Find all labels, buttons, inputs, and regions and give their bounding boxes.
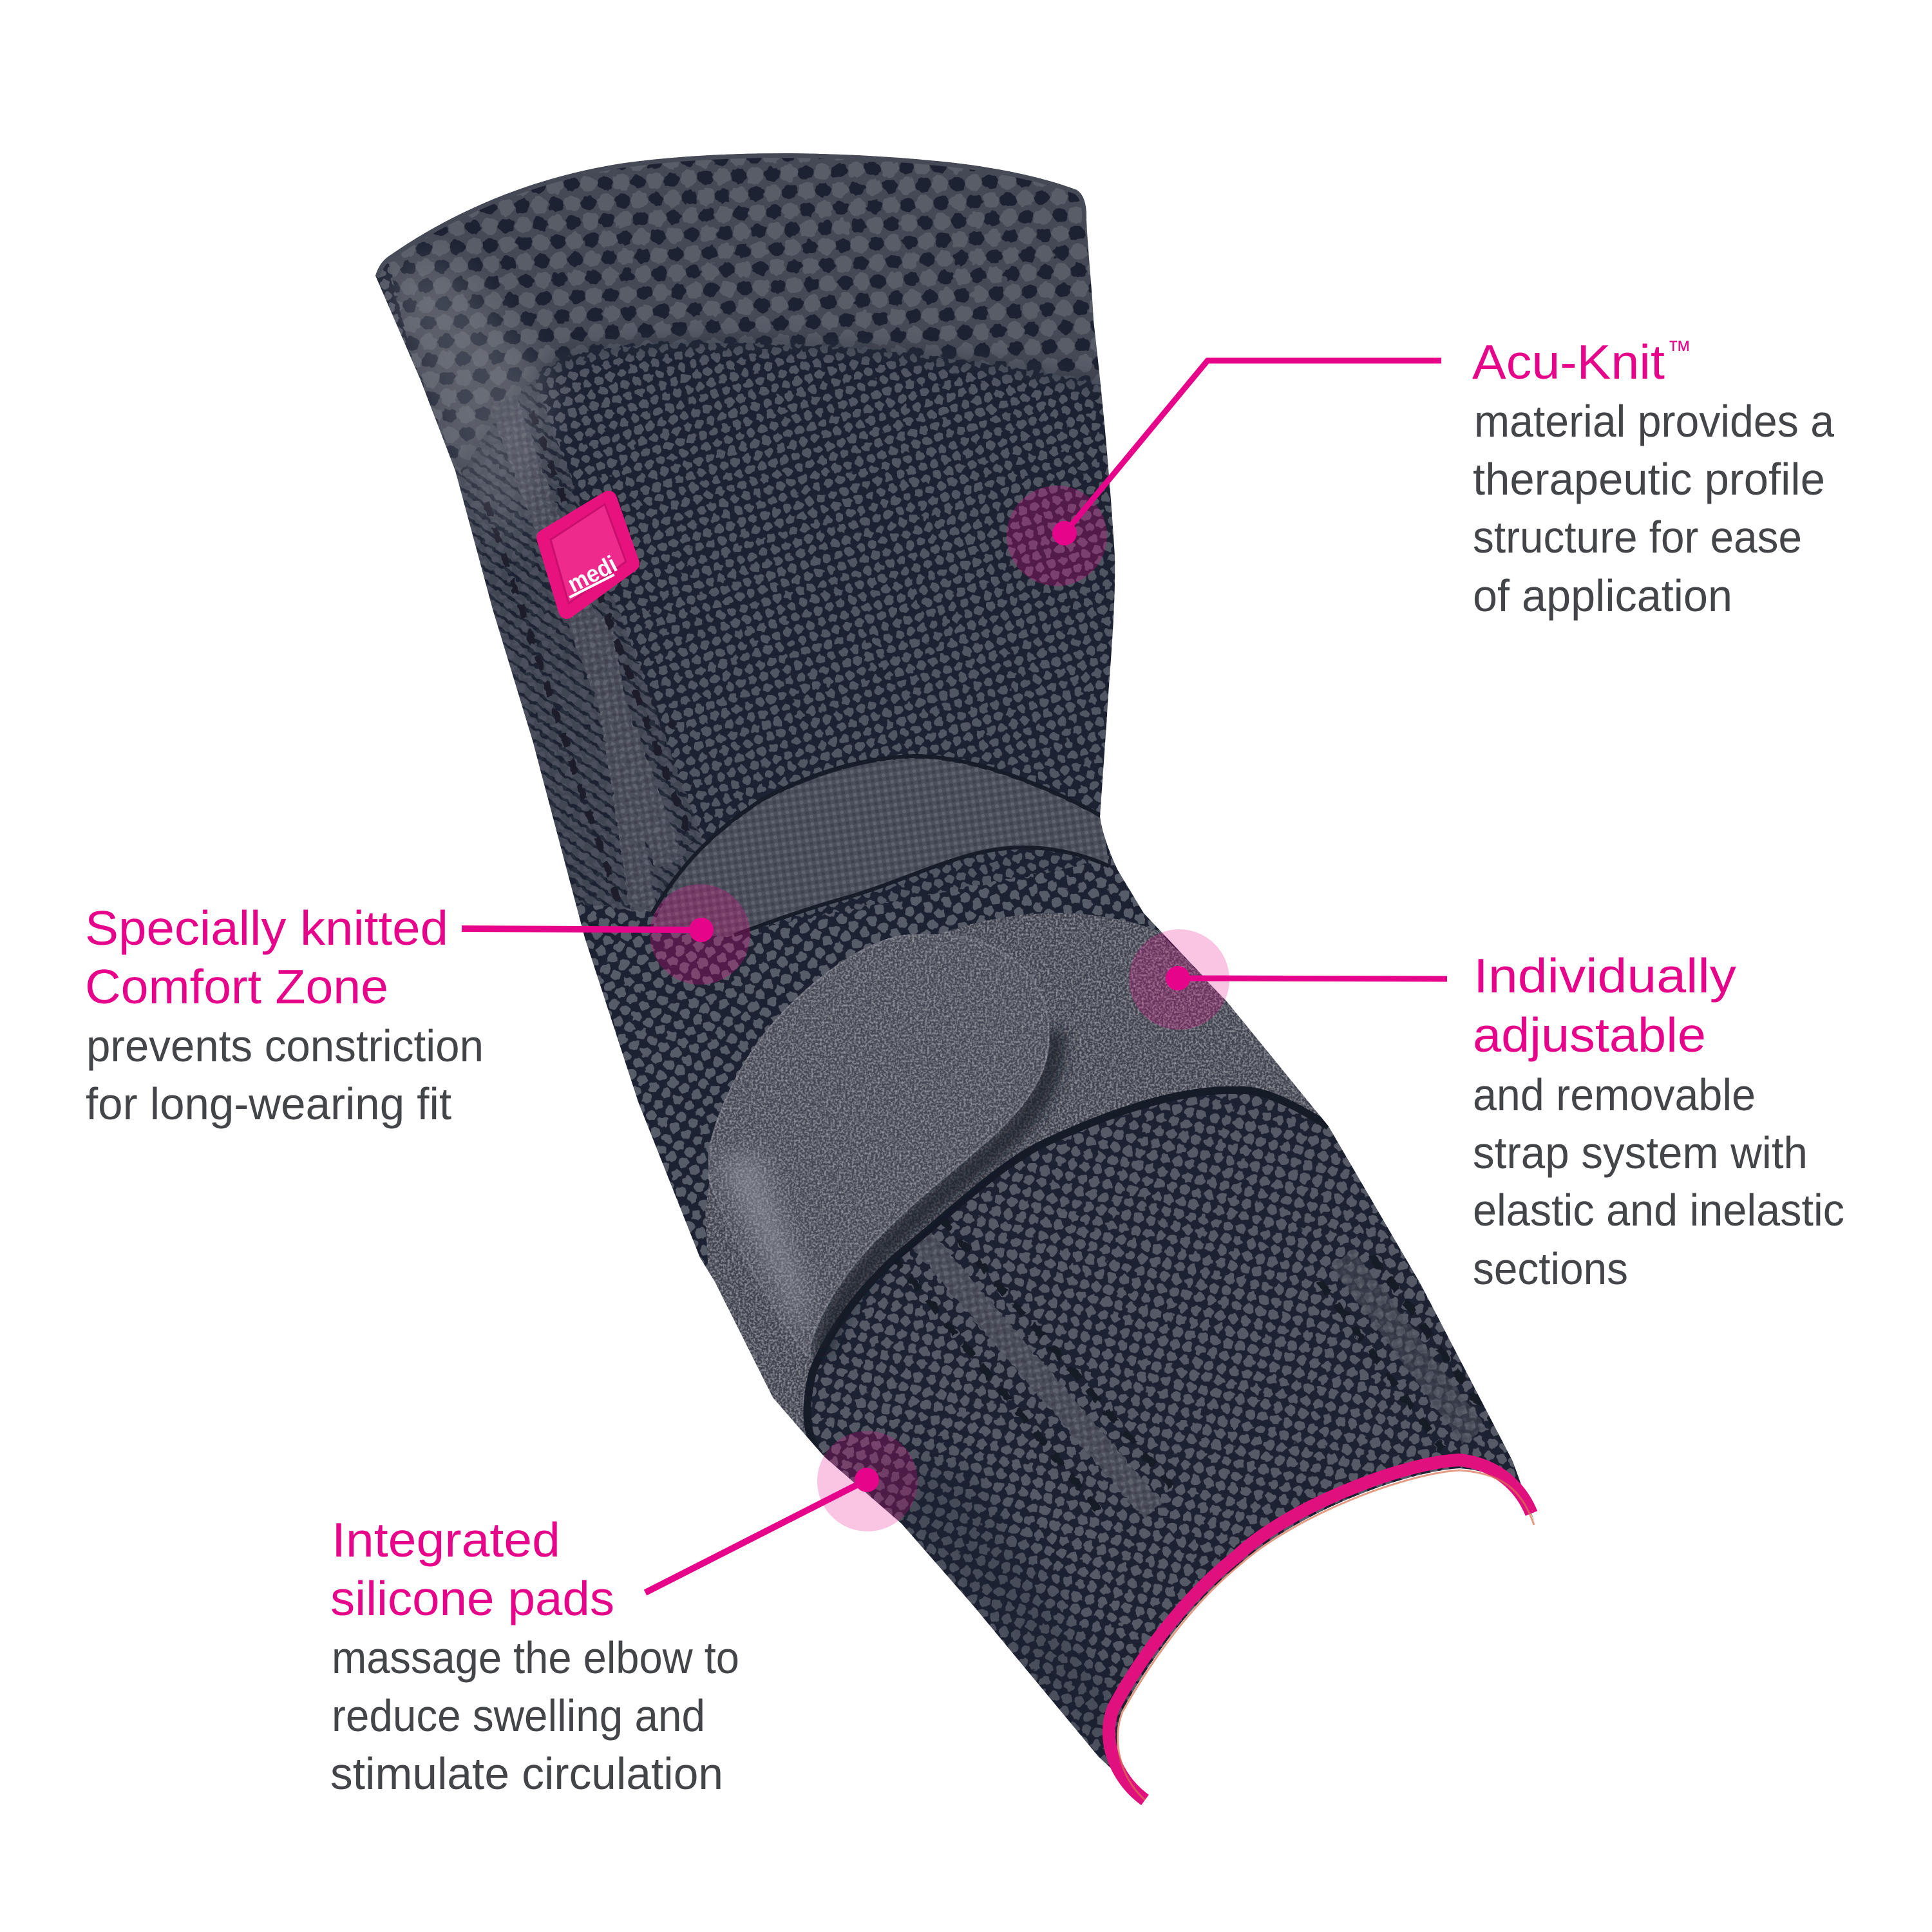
left lit highlight <box>380 258 554 554</box>
text block: Specially knitted Comfort Zone: Comfort Zone <box>85 960 388 1014</box>
text block: Integrated silicone pads: massage the elbow to <box>332 1633 739 1683</box>
pink binding at opening <box>1109 1460 1531 1800</box>
medi logo tag <box>545 499 631 611</box>
text block: Individually adjustable: sections <box>1473 1244 1628 1294</box>
velcro flap <box>708 934 1049 1357</box>
text block: Individually adjustable: and removable <box>1473 1070 1756 1120</box>
text block: Acu-Knit: therapeutic profile <box>1473 454 1825 504</box>
text block: Acu-Knit: material provides a <box>1474 396 1834 446</box>
callout: strap marker <box>1129 929 1447 1030</box>
callout: Acu-Knit marker <box>1007 361 1441 586</box>
orange lining edge <box>1118 1470 1534 1800</box>
text block: Individually adjustable: elastic and inelastic <box>1473 1185 1844 1235</box>
text block: Specially knitted Comfort Zone: Specially knitted <box>85 901 448 955</box>
text block: Integrated silicone pads: stimulate circulation <box>330 1748 723 1799</box>
text block: Integrated silicone pads: Integrated <box>332 1513 560 1567</box>
comfort band dark edges <box>652 756 1109 935</box>
text block: Specially knitted Comfort Zone: for long-wearing fit <box>86 1079 451 1129</box>
strap dark lower edge <box>808 1090 1329 1448</box>
text block: Individually adjustable: adjustable <box>1473 1008 1706 1062</box>
text block: Acu-Knit: ™ <box>1667 335 1691 365</box>
cuff transition shade <box>460 343 1108 477</box>
text block: Acu-Knit <box>1472 335 1834 621</box>
top coarse-knit cuff band <box>361 142 1108 477</box>
medi logo tag: medi <box>564 551 621 598</box>
lower lighter diagonal rib <box>914 1231 1475 1510</box>
flap highlight <box>715 1153 807 1346</box>
comfort band <box>652 759 1109 937</box>
text block: Integrated silicone pads <box>330 1513 739 1799</box>
infographic canvas <box>86 153 1843 1806</box>
text block: Individually adjustable <box>1473 949 1844 1294</box>
text block: Acu-Knit: of application <box>1473 571 1732 621</box>
text block: Individually adjustable: strap system with <box>1473 1128 1808 1178</box>
strap body <box>705 913 1329 1448</box>
lower knit forearm panel <box>792 1082 1558 1823</box>
elbow sleeve product <box>361 142 1558 1823</box>
lower rib dark dashes <box>892 1217 1494 1513</box>
dark lower-edge shading <box>837 1455 1146 1765</box>
cuff top rim <box>375 153 1086 276</box>
knit textures <box>361 142 1558 1823</box>
text block: Acu-Knit: Acu-Knit <box>1472 335 1665 389</box>
text block: Specially knitted Comfort Zone: prevents constriction <box>86 1021 484 1071</box>
text block: Acu-Knit: structure for ease <box>1473 512 1802 562</box>
left striped knit area <box>412 361 708 953</box>
side rib dark dashes <box>486 412 692 902</box>
callout: silicone pads marker <box>645 1431 918 1593</box>
text block: Integrated silicone pads: silicone pads <box>330 1571 614 1625</box>
text block: Specially knitted Comfort Zone <box>85 901 484 1129</box>
middle knit below comfort band <box>567 850 1224 1320</box>
upper knit panel <box>375 255 1115 927</box>
text block: Integrated silicone pads: reduce swelling and <box>332 1690 705 1741</box>
flap shadow <box>819 1030 1054 1352</box>
side ribs <box>502 399 670 914</box>
text block: Individually adjustable: Individually <box>1473 949 1737 1003</box>
callout: comfort zone marker <box>462 884 750 985</box>
